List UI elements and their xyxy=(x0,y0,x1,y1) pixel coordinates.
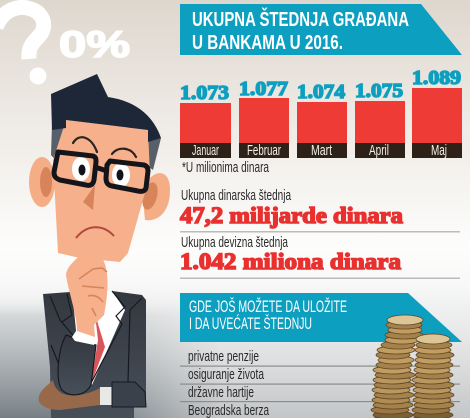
nose xyxy=(83,185,95,210)
finger lines xyxy=(79,268,107,316)
stat: dinar savings: 47,2 milijarde dinara xyxy=(180,203,404,228)
bar: Maj: Maj xyxy=(431,142,447,159)
mouth xyxy=(76,227,114,238)
bar: Mart xyxy=(297,81,347,159)
shirt xyxy=(72,291,125,385)
zero percent label: 0% xyxy=(59,24,130,65)
lower hand xyxy=(39,380,100,410)
bar: April: April xyxy=(369,142,389,159)
tie xyxy=(91,314,105,384)
banner: total savings title: U BANKAMA U 2016. xyxy=(192,32,343,54)
face xyxy=(53,120,150,262)
bar: Januar: Januar xyxy=(192,142,219,159)
stat: dinar savings xyxy=(180,187,460,232)
banner: where else to invest: GDE JOŠ MOŽETE DA ULOŽITE xyxy=(189,297,347,316)
icon: coin stacks xyxy=(371,315,454,418)
chart footnote: *U milionima dinara xyxy=(182,159,269,176)
bar: Maj: 1.089 xyxy=(412,67,461,89)
bar: Februar: Februar xyxy=(247,142,281,159)
bar: April xyxy=(355,80,405,159)
bar: Januar xyxy=(180,82,231,159)
pocket xyxy=(112,382,146,407)
eyebrows xyxy=(73,137,136,157)
ears xyxy=(29,157,170,220)
eyes xyxy=(72,157,130,187)
list: investment options: državne hartije xyxy=(188,384,254,401)
lapels xyxy=(50,291,142,385)
stat: foreign currency savings: 1.042 miliona dinara xyxy=(180,249,402,274)
jacket xyxy=(43,291,146,418)
hair xyxy=(51,74,161,142)
bar: Mart: Mart xyxy=(311,142,333,159)
raised arm xyxy=(58,335,96,395)
bar: Mart: 1.074 xyxy=(297,81,345,103)
bar: April: 1.075 xyxy=(355,80,403,102)
bar: Februar: 1.077 xyxy=(239,78,288,100)
lower cuff xyxy=(100,387,112,405)
bar chart: monthly savings xyxy=(180,67,462,159)
left stack xyxy=(371,315,423,418)
stat: foreign currency savings: Ukupna devizna štednja xyxy=(181,234,288,251)
list: investment options: privatne penzije xyxy=(188,348,259,365)
icon: question mark xyxy=(0,7,46,85)
list: investment options xyxy=(180,348,460,418)
bar: Januar: 1.073 xyxy=(180,82,229,104)
banner: where else to invest: I DA UVEĆATE ŠTEDNJU xyxy=(189,314,312,333)
bar: Februar xyxy=(239,78,289,159)
hair sides xyxy=(51,125,161,170)
bar: Maj xyxy=(412,67,462,159)
glasses xyxy=(54,152,148,191)
right stack xyxy=(411,334,454,418)
shirt cuff xyxy=(72,331,96,345)
raised hand xyxy=(66,253,108,337)
stat: foreign currency savings xyxy=(180,234,460,279)
list: investment options: osiguranje života xyxy=(188,366,264,383)
banner: total savings title xyxy=(180,4,462,55)
illustration: thinking man xyxy=(29,74,170,418)
banner: where else to invest xyxy=(180,293,462,342)
stat: dinar savings: Ukupna dinarska štednja xyxy=(181,187,291,204)
